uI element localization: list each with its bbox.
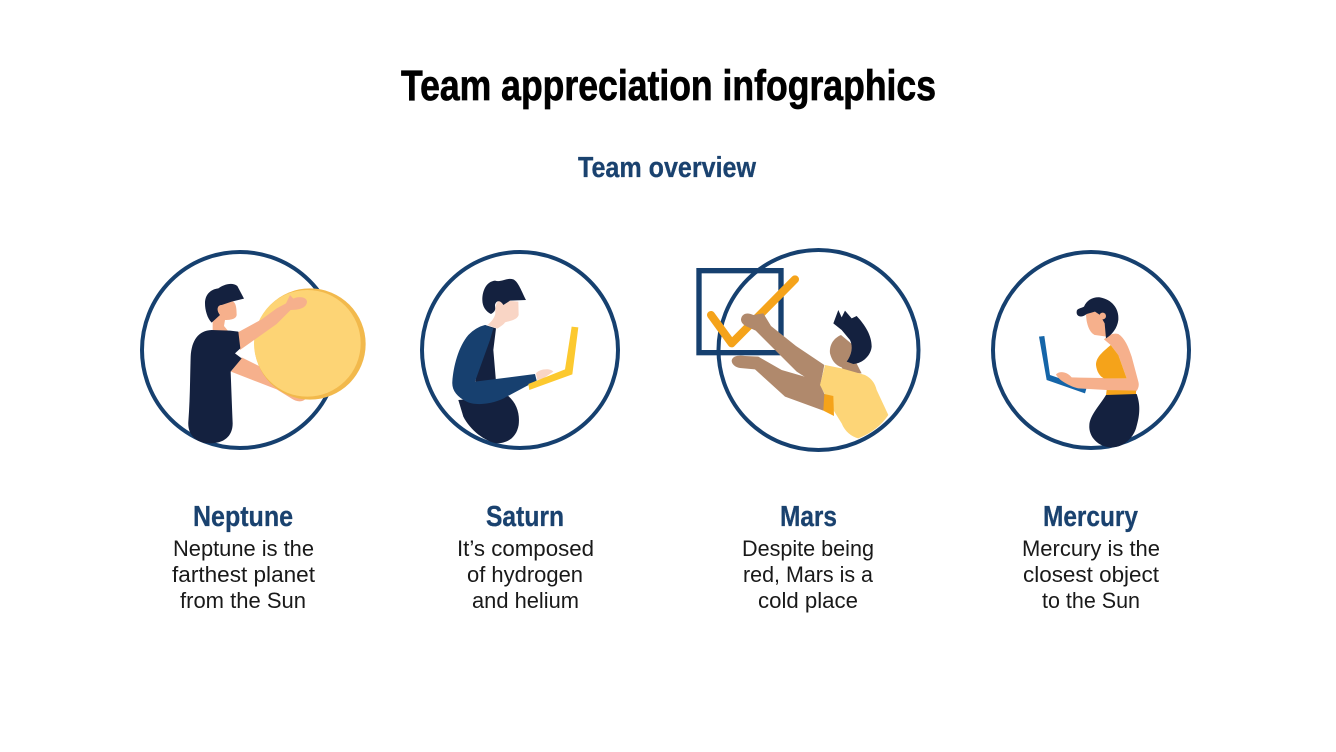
text: Mercury description: to the Sun xyxy=(1042,588,1140,613)
text: Saturn description: and helium xyxy=(472,588,579,613)
title: Team appreciation infographics xyxy=(401,62,936,110)
text: Saturn description xyxy=(457,536,594,613)
text: Mars description: Despite being xyxy=(742,536,874,561)
text: Mercury description: Mercury is the xyxy=(1022,536,1160,561)
text: Saturn description: of hydrogen xyxy=(467,562,583,587)
text: Mercury description xyxy=(1022,536,1160,613)
text: Mars description: red, Mars is a xyxy=(743,562,874,587)
subtitle: Team overview xyxy=(578,152,756,184)
text: Mercury description: closest object xyxy=(1023,562,1159,587)
text: Neptune description: from the Sun xyxy=(180,588,306,613)
text: Neptune description: farthest planet xyxy=(172,562,315,587)
column: Saturn xyxy=(457,501,594,613)
heading: Saturn: Saturn xyxy=(486,501,564,533)
text: Mars description: cold place xyxy=(758,588,858,613)
column: Mars xyxy=(742,501,874,613)
icon: Mercury person with laptop xyxy=(993,252,1189,448)
text: Saturn description: It’s composed xyxy=(457,536,594,561)
heading: Mars: Mars xyxy=(780,501,837,533)
icon: Saturn person with laptop xyxy=(422,252,618,448)
icon: Neptune person holding ball xyxy=(142,252,366,448)
heading: Neptune: Neptune xyxy=(193,501,293,533)
column: Mercury xyxy=(1022,501,1160,613)
heading: Mercury: Mercury xyxy=(1043,501,1138,533)
text: Neptune description xyxy=(172,536,315,613)
text: Mars description xyxy=(742,536,874,613)
icon: Mars person with checkbox xyxy=(699,250,918,450)
column: Neptune xyxy=(172,501,315,613)
text: Neptune description: Neptune is the xyxy=(173,536,314,561)
